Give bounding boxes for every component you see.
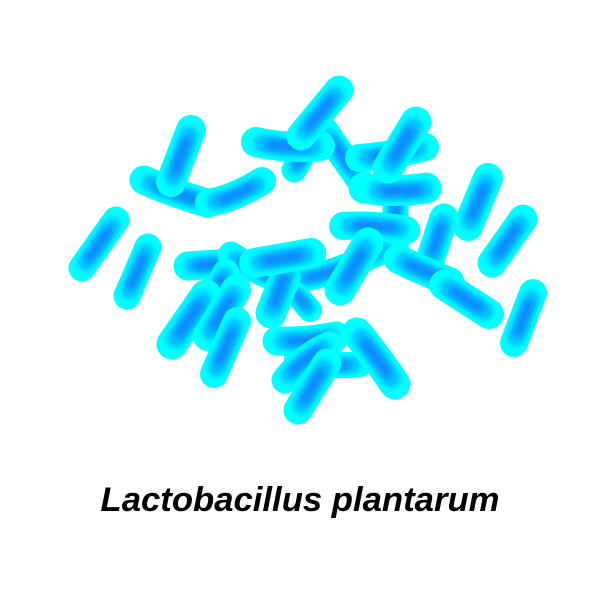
bacterium: centre horizontal [343,226,406,230]
bacterium: tilted upper right [388,122,416,168]
bacterium: right lower horizontal [398,259,450,282]
bacterium: bottom back horizontal [297,358,360,365]
bacterium: far right tall [468,178,488,226]
bacterium: far left lower [127,247,148,296]
bacterium: short behind middle [292,290,310,310]
bacterium: short below top [294,147,308,170]
bacterium: bottom front [298,363,327,410]
bacterium: diagonal centre [326,132,358,178]
bacterium: upright on V [171,130,191,182]
bacterium: far right short [514,293,533,343]
bacterium: left slanted lower [172,295,206,344]
bacterium: far right slanted [492,219,523,263]
bacterium: tilted top [301,90,339,136]
bacterium: middle slanted front [214,321,237,374]
bacterium: right lower front [444,285,489,314]
bacterium: diagonal back in middle group [231,255,285,281]
bacterium: middle vertical [271,268,288,313]
bacterium: horizontal top [256,142,320,147]
illustration: bacteria cluster [82,90,533,410]
title: Lactobacillus plantarum [100,481,500,519]
bacterium: centre tilted [340,243,368,290]
bacterium: right vertical [430,218,444,260]
bacterium: bottom slant right [357,333,395,384]
bacterium: middle front horizontal [254,253,311,263]
bacterium: far left upper [82,220,116,268]
bacterium: middle slanted [208,290,236,336]
bacterium: back horizontal right [359,147,425,158]
bacterium: horizontal blob [364,188,430,191]
bacterium: short vertical [395,185,396,232]
bacterium: V left wing [144,180,207,203]
bacterium: back tilted [207,272,226,303]
bacterium: left horizontal in middle group [188,263,232,266]
bacterium: bottom slant back [285,345,329,380]
bacterium: curved back band [283,244,396,281]
bacterium: V right wing [209,181,262,203]
bacterium: bottom horizontal [277,336,336,341]
